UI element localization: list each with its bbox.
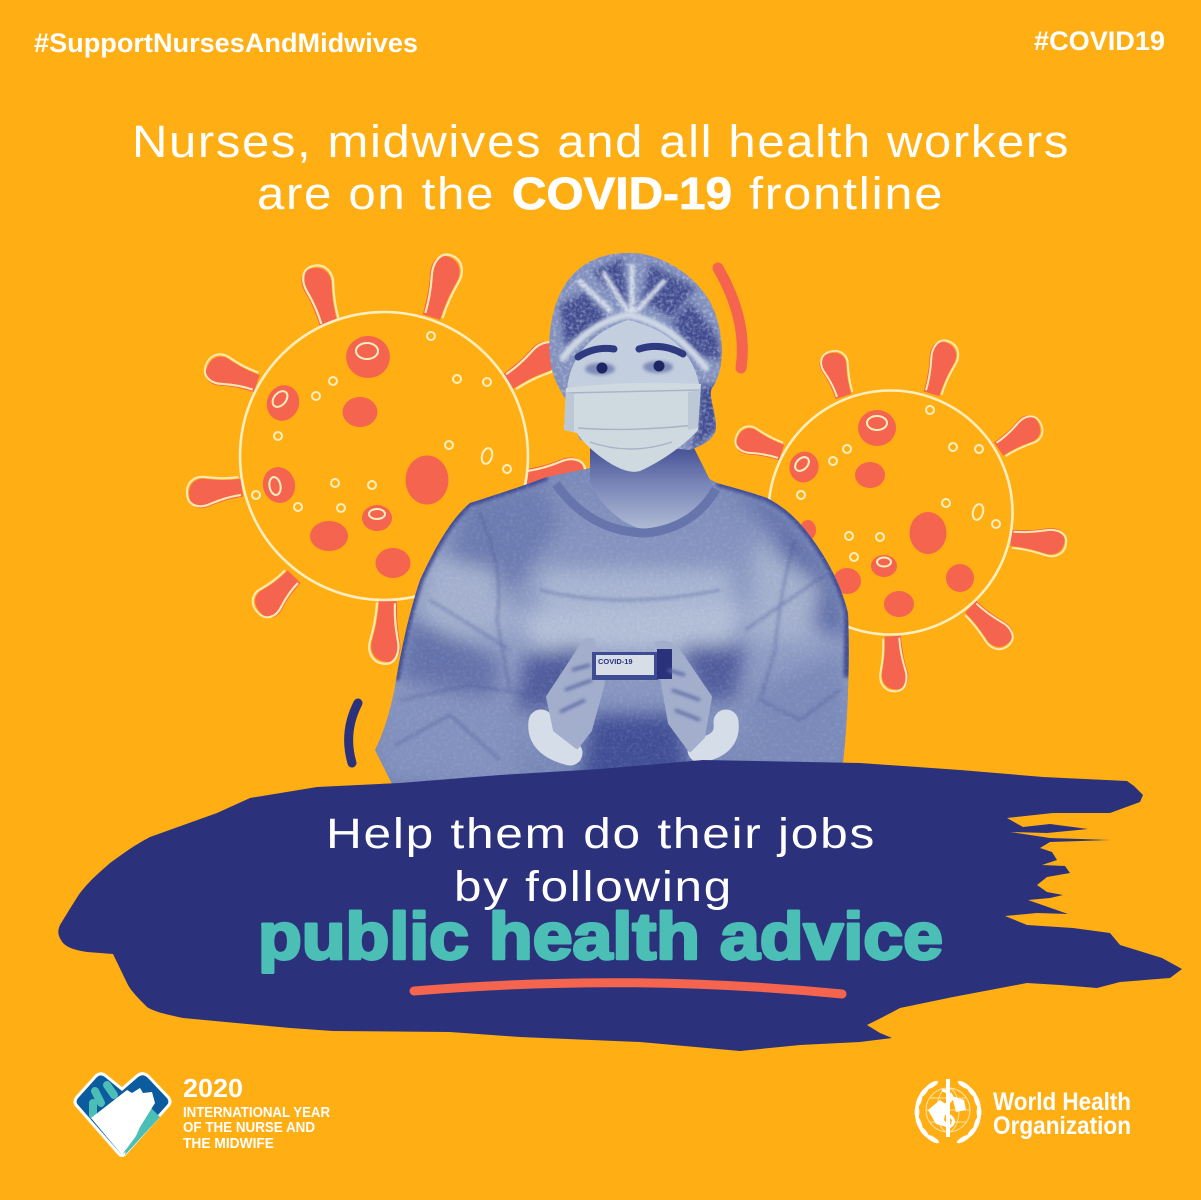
vial: COVID-19 [598, 657, 633, 666]
icon: who emblem [914, 1079, 982, 1145]
brush stroke banner [58, 760, 1182, 1051]
logo: world health organization [914, 1079, 1131, 1145]
eyes [585, 360, 673, 375]
surgical mask [564, 383, 701, 472]
organization name: World Health [993, 1088, 1131, 1116]
year and title: THE MIDWIFE [183, 1136, 274, 1152]
accent arc: coral [718, 268, 742, 368]
organization name: Organization [993, 1112, 1131, 1140]
hashtag: support nurses and midwives: #SupportNursesAndMidwives [34, 28, 418, 58]
year and title: 2020 [183, 1073, 243, 1103]
headline: frontline [749, 168, 944, 219]
collar [556, 484, 716, 533]
call to action text [258, 810, 943, 973]
virus: right [732, 337, 1067, 692]
headline: are on the [257, 168, 495, 219]
neck [590, 440, 714, 530]
face [567, 320, 700, 400]
vial [592, 649, 672, 680]
headline: COVID-19 [512, 168, 732, 219]
hair net [549, 253, 722, 450]
glove cuffs [541, 722, 726, 753]
accent arc: navy [349, 703, 358, 763]
hashtag: covid19: #COVID19 [1034, 26, 1165, 56]
logo: international year of the nurse and the midwife [75, 1073, 330, 1156]
icon: heart hands [75, 1074, 170, 1156]
call to action text: Help them do their jobs [326, 810, 876, 858]
gown shading along the edge [396, 477, 848, 680]
call to action text: by following [454, 863, 733, 911]
right glove [657, 642, 710, 750]
headline [132, 116, 1070, 219]
coral underline [414, 983, 842, 994]
year and title: INTERNATIONAL YEAR [183, 1105, 330, 1121]
eyebrows [578, 346, 683, 357]
net band [563, 315, 706, 368]
virus: left [185, 251, 588, 665]
year and title [183, 1073, 330, 1152]
headline: Nurses, midwives and all health workers [132, 116, 1070, 167]
year and title: OF THE NURSE AND [183, 1120, 315, 1136]
health worker photo [370, 250, 860, 795]
left glove [548, 640, 603, 747]
gown [370, 465, 860, 795]
call to action text: public health advice [258, 899, 943, 973]
organization name [993, 1088, 1131, 1140]
